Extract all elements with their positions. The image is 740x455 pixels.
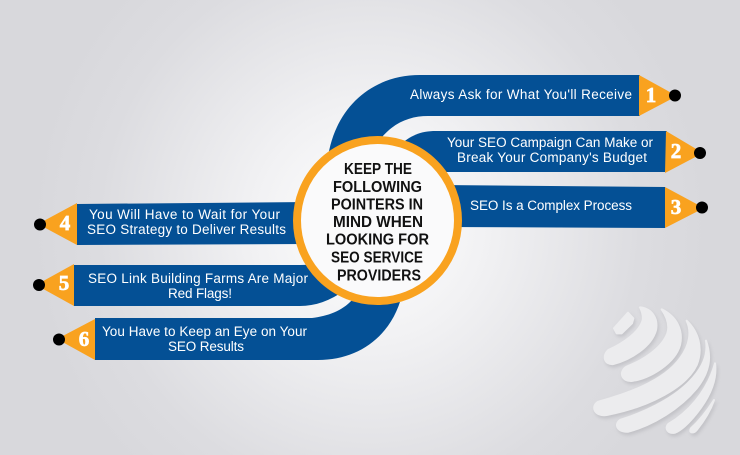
heading: MIND WHEN [333, 214, 423, 231]
heading: KEEP THE [344, 161, 412, 178]
heading: POINTERS IN [331, 196, 423, 214]
pointer 3: 3 [671, 195, 681, 219]
label 6: You Have to Keep an Eye on Your [102, 324, 308, 339]
heading: LOOKING FOR [326, 232, 429, 248]
label 5: SEO Link Building Farms Are Major [88, 271, 308, 286]
label 5 second line: Red Flags! [168, 286, 232, 301]
label 4 second line: SEO Strategy to Deliver Results [87, 222, 286, 237]
ribbon 6: bottom arc [53, 295, 402, 360]
label 2: Your SEO Campaign Can Make or [447, 135, 654, 150]
central circle [297, 140, 458, 301]
pointer 1: 1 [646, 83, 656, 107]
pointer 2: 2 [671, 139, 681, 163]
heading: SEO SERVICE [331, 250, 423, 266]
label 2 second line: Break Your Company's Budget [457, 150, 647, 165]
label 3: SEO Is a Complex Process [470, 198, 632, 213]
pointer 6 [53, 319, 95, 360]
heading [326, 161, 429, 284]
pointer 3 [665, 187, 708, 228]
icon: watermark globe [594, 307, 715, 433]
label 6 second line: SEO Results [168, 339, 244, 354]
pointer 1 [639, 75, 681, 116]
pointer 5 [33, 264, 74, 306]
label 4: You Will Have to Wait for Your [89, 207, 280, 222]
pointer 2 [665, 131, 706, 173]
ribbon 2 [400, 131, 706, 173]
label 1: Always Ask for What You'll Receive [410, 87, 632, 102]
ribbon 5 [33, 260, 345, 306]
ribbon 3 [440, 185, 708, 228]
pointer 4: 4 [60, 211, 71, 235]
pointer 5: 5 [59, 271, 69, 295]
pointer 6: 6 [79, 327, 89, 351]
ribbon 4 [34, 202, 310, 245]
heading: PROVIDERS [337, 268, 421, 284]
ribbon 1: top arc [327, 75, 681, 165]
pointer 4 [34, 203, 77, 245]
heading: FOLLOWING [333, 179, 422, 196]
